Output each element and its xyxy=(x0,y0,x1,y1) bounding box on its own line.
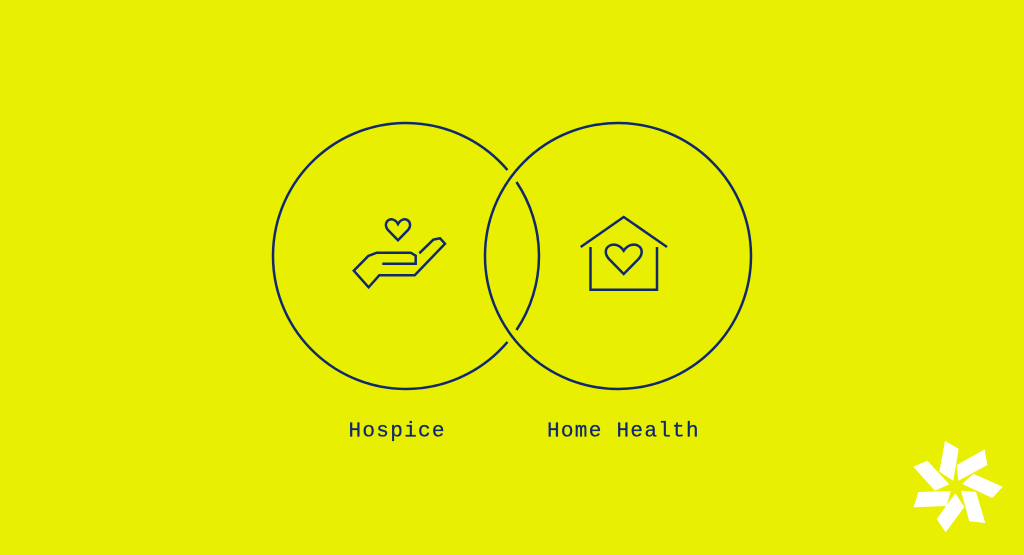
label: Home Health: Home Health xyxy=(547,420,700,444)
circle: hospice xyxy=(273,123,539,389)
logo: white pinwheel xyxy=(913,441,1003,532)
circle: home health xyxy=(485,123,751,389)
icon: house with heart xyxy=(581,217,667,290)
icon: hand holding heart xyxy=(354,219,445,287)
label: Hospice: Hospice xyxy=(348,420,446,444)
venn diagram xyxy=(273,123,751,389)
